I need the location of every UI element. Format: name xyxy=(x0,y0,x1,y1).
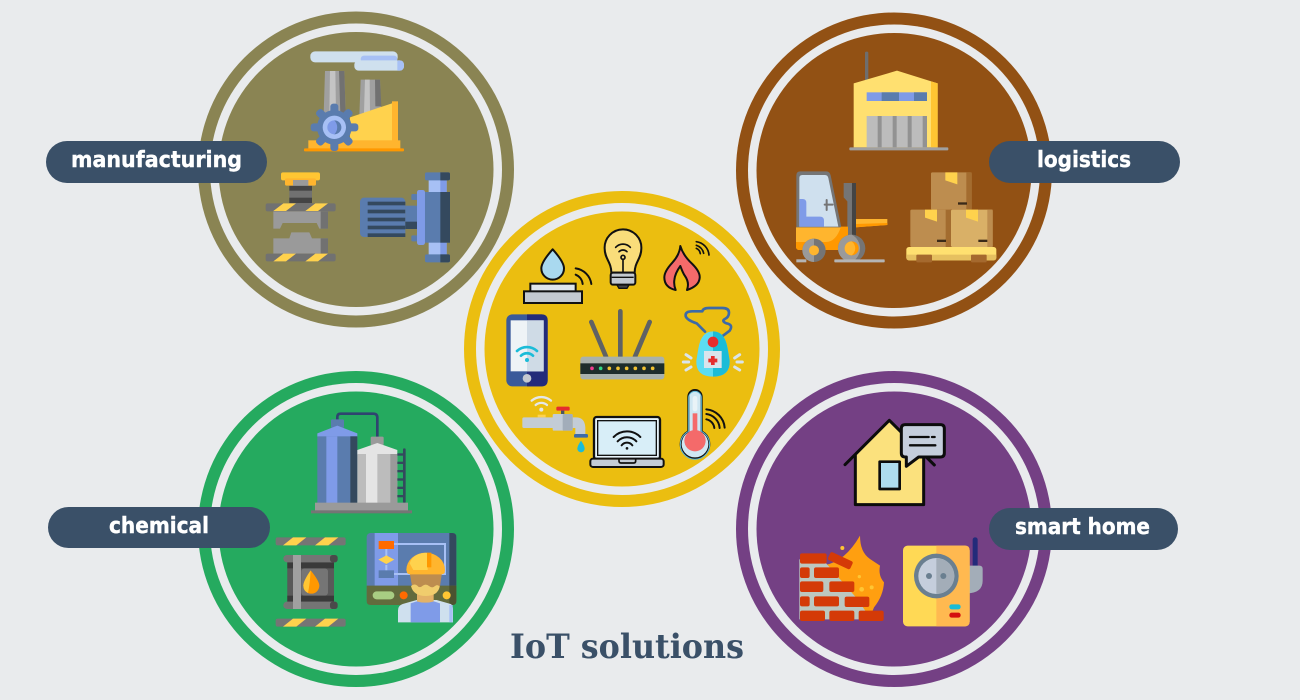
icon: smartphone xyxy=(506,314,548,386)
icon: firewall xyxy=(799,536,884,621)
label: chemical xyxy=(48,507,270,548)
icon: warehouse xyxy=(849,52,948,150)
panel: manufacturing xyxy=(198,12,514,328)
label: manufacturing: manufacturing xyxy=(71,148,242,173)
icon: water sensor xyxy=(524,249,591,303)
panel: IoT devices hub xyxy=(464,191,780,507)
panel: logistics xyxy=(736,12,1052,328)
icon: oil barrel xyxy=(276,537,346,627)
icon: gas flame sensor xyxy=(664,242,709,290)
label: logistics: logistics xyxy=(1037,148,1131,173)
icon: electric pump xyxy=(360,172,450,262)
icon: hydraulic press xyxy=(266,172,336,261)
icon: smart bulb xyxy=(605,229,641,288)
icon: smart thermometer xyxy=(680,390,725,459)
label: smart home: smart home xyxy=(1015,515,1150,540)
panel: smart home xyxy=(736,371,1052,687)
icon: storage tanks xyxy=(311,414,412,513)
label: smart home xyxy=(989,508,1178,550)
icon: laptop xyxy=(590,417,664,467)
label: manufacturing xyxy=(46,141,267,183)
icon: house with speech bubble xyxy=(845,420,944,505)
icon: factory with gear xyxy=(304,51,404,151)
label: logistics xyxy=(989,141,1180,183)
icon: medical alert pendant xyxy=(683,308,742,377)
title: IoT solutions xyxy=(510,627,744,667)
icon: forklift xyxy=(796,171,887,262)
panel: chemical xyxy=(198,371,514,687)
label: chemical: chemical xyxy=(109,514,209,539)
icon: smart water tap xyxy=(522,397,588,452)
icon: smart socket xyxy=(903,537,983,626)
icon: engineer at control panel xyxy=(367,533,456,622)
icon: wifi router xyxy=(580,311,664,379)
icon: boxes on pallet xyxy=(906,172,996,262)
